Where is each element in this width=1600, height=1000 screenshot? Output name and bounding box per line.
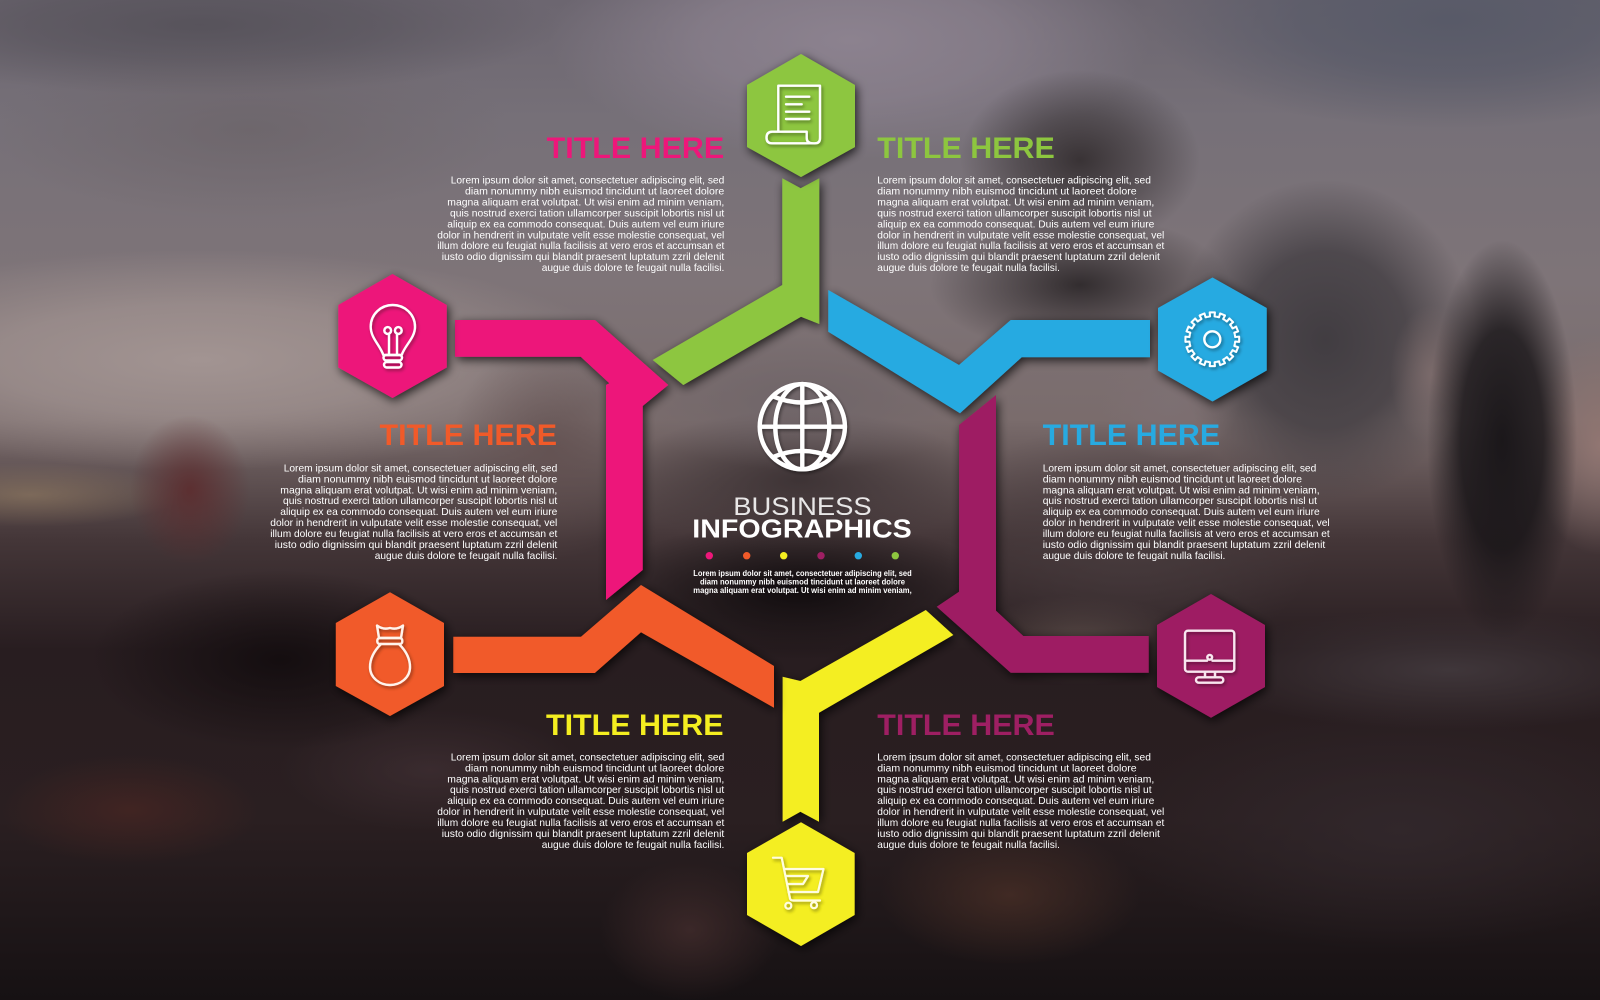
text block: pink: iusto odio dignissim qui blandit praesent luptatum zzril delenit <box>442 252 724 263</box>
hexagon: green document <box>747 54 855 177</box>
text block: orange: aliquip ex ea commodo consequat. Duis autem vel eum iriure <box>280 507 558 518</box>
title: blue: TITLE HERE <box>1043 419 1220 452</box>
centre description: magna aliquam erat volutpat. Ut wisi enim ad minim veniam, <box>693 586 912 595</box>
text block: yellow: Lorem ipsum dolor sit amet, consectetuer adipiscing elit, sed <box>451 752 725 763</box>
text block: orange: magna aliquam erat volutpat. Ut wisi enim ad minim veniam, <box>280 485 557 496</box>
text block: green: augue duis dolore te feugait nulla facilisi. <box>877 263 1060 274</box>
hexagon: pink light bulb <box>338 274 447 398</box>
centre description: diam nonummy nibh euismod tincidunt ut laoreet dolore <box>700 578 906 586</box>
text block: blue: augue duis dolore te feugait nulla facilisi. <box>1043 551 1225 562</box>
text block: plum <box>877 752 1164 851</box>
text block: orange: iusto odio dignissim qui blandit praesent luptatum zzril delenit <box>275 540 557 551</box>
text block: pink: magna aliquam erat volutpat. Ut wisi enim ad minim veniam, <box>447 197 724 208</box>
text block: yellow: iusto odio dignissim qui blandit praesent luptatum zzril delenit <box>442 829 724 840</box>
text block: blue: diam nonummy nibh euismod tincidunt ut laoreet dolore <box>1043 474 1302 485</box>
text block: plum: illum dolore eu feugiat nulla facilisis at vero eros et accumsan et <box>877 818 1164 829</box>
text block: green: Lorem ipsum dolor sit amet, consectetuer adipiscing elit, sed <box>877 176 1151 187</box>
connector arm: yellow <box>783 610 953 822</box>
hexagon: orange money bag <box>336 592 444 716</box>
text block: orange: quis nostrud exerci tation ullamcorper suscipit lobortis nisl ut <box>283 496 557 507</box>
text block: blue: iusto odio dignissim qui blandit praesent luptatum zzril delenit <box>1043 540 1325 551</box>
text block: yellow: diam nonummy nibh euismod tincidunt ut laoreet dolore <box>465 763 725 774</box>
text block: blue: aliquip ex ea commodo consequat. Duis autem vel eum iriure <box>1043 507 1320 518</box>
connector arm: blue <box>828 290 1150 413</box>
text block: orange: diam nonummy nibh euismod tincidunt ut laoreet dolore <box>298 474 558 485</box>
text block: green: aliquip ex ea commodo consequat. Duis autem vel eum iriure <box>877 219 1155 230</box>
icon: shopping cart <box>773 858 824 909</box>
icon: money bag <box>370 626 410 685</box>
centre description: Lorem ipsum dolor sit amet, consectetuer adipiscing elit, sed <box>693 569 912 578</box>
text block: yellow: augue duis dolore te feugait nulla facilisi. <box>542 840 724 851</box>
connector arm: green <box>653 178 819 385</box>
text block: green: quis nostrud exerci tation ullamcorper suscipit lobortis nisl ut <box>877 208 1152 219</box>
text block: pink: illum dolore eu feugiat nulla facilisis at vero eros et accumsan et <box>437 241 724 252</box>
text block: yellow: illum dolore eu feugiat nulla facilisis at vero eros et accumsan et <box>437 818 724 829</box>
text block: green: dolor in hendrerit in vulputate velit esse molestie consequat, vel <box>877 230 1164 241</box>
text block: blue: dolor in hendrerit in vulputate velit esse molestie consequat, vel <box>1043 518 1330 529</box>
centre description <box>693 569 912 595</box>
hexagon: blue gear <box>1158 278 1267 402</box>
hexagon: yellow cart <box>747 822 855 946</box>
heading: infographics: INFOGRAPHICS <box>692 514 912 544</box>
text block: green: diam nonummy nibh euismod tincidunt ut laoreet dolore <box>877 187 1137 198</box>
text block: blue: Lorem ipsum dolor sit amet, consectetuer adipiscing elit, sed <box>1043 463 1317 474</box>
connector arm: plum <box>937 395 1149 673</box>
text block: green: magna aliquam erat volutpat. Ut wisi enim ad minim veniam, <box>877 197 1154 208</box>
text block: pink: augue duis dolore te feugait nulla facilisi. <box>542 263 724 274</box>
text block: yellow <box>437 752 725 851</box>
text block: yellow: dolor in hendrerit in vulputate velit esse molestie consequat, vel <box>437 807 724 818</box>
text block: orange: augue duis dolore te feugait nulla facilisi. <box>375 551 557 562</box>
text block: green <box>877 176 1164 274</box>
title: green: TITLE HERE <box>877 132 1055 165</box>
centre panel <box>692 384 912 595</box>
icon: desktop monitor <box>1185 631 1234 683</box>
text block: pink <box>437 176 725 274</box>
text block: plum: aliquip ex ea commodo consequat. Duis autem vel eum iriure <box>877 796 1155 807</box>
text block: blue: quis nostrud exerci tation ullamcorper suscipit lobortis nisl ut <box>1043 496 1317 507</box>
title: yellow: TITLE HERE <box>546 709 724 742</box>
connector arm: pink <box>455 320 668 600</box>
text block: yellow: aliquip ex ea commodo consequat. Duis autem vel eum iriure <box>447 796 725 807</box>
text block: green: illum dolore eu feugiat nulla facilisis at vero eros et accumsan et <box>877 241 1164 252</box>
text block: yellow: magna aliquam erat volutpat. Ut wisi enim ad minim veniam, <box>447 774 724 785</box>
text block: plum: iusto odio dignissim qui blandit praesent luptatum zzril delenit <box>877 829 1160 840</box>
text block: orange: illum dolore eu feugiat nulla facilisis at vero eros et accumsan et <box>270 529 557 540</box>
title: plum: TITLE HERE <box>877 709 1055 742</box>
text block: plum: diam nonummy nibh euismod tincidunt ut laoreet dolore <box>877 763 1137 774</box>
text block: blue: illum dolore eu feugiat nulla facilisis at vero eros et accumsan et <box>1043 529 1330 540</box>
text block: green: iusto odio dignissim qui blandit praesent luptatum zzril delenit <box>877 252 1160 263</box>
icon: light bulb <box>371 305 415 368</box>
text block: blue <box>1043 463 1330 562</box>
text block: pink: quis nostrud exerci tation ullamcorper suscipit lobortis nisl ut <box>450 208 724 219</box>
colour dots <box>706 552 899 559</box>
text block: plum: Lorem ipsum dolor sit amet, consectetuer adipiscing elit, sed <box>877 752 1151 763</box>
hexagon: plum monitor <box>1157 594 1265 718</box>
text block: plum: augue duis dolore te feugait nulla facilisi. <box>877 840 1060 851</box>
text block: yellow: quis nostrud exerci tation ullamcorper suscipit lobortis nisl ut <box>450 785 724 796</box>
text block: pink: diam nonummy nibh euismod tincidunt ut laoreet dolore <box>465 187 725 198</box>
text block: plum: quis nostrud exerci tation ullamcorper suscipit lobortis nisl ut <box>877 785 1152 796</box>
text block: pink: Lorem ipsum dolor sit amet, consectetuer adipiscing elit, sed <box>451 176 725 187</box>
connector arm: orange <box>453 585 774 708</box>
icon: globe <box>760 384 845 469</box>
text block: pink: dolor in hendrerit in vulputate velit esse molestie consequat, vel <box>437 230 724 241</box>
text block: blue: magna aliquam erat volutpat. Ut wisi enim ad minim veniam, <box>1043 485 1320 496</box>
icon: gear <box>1185 312 1239 366</box>
text block: orange: Lorem ipsum dolor sit amet, consectetuer adipiscing elit, sed <box>284 463 558 474</box>
icon: scroll document <box>766 86 820 143</box>
heading: business: BUSINESS <box>733 493 872 521</box>
text block: plum: dolor in hendrerit in vulputate velit esse molestie consequat, vel <box>877 807 1164 818</box>
text block: plum: magna aliquam erat volutpat. Ut wisi enim ad minim veniam, <box>877 774 1154 785</box>
text block: orange: dolor in hendrerit in vulputate velit esse molestie consequat, vel <box>270 518 557 529</box>
title: orange: TITLE HERE <box>380 419 557 452</box>
text block: pink: aliquip ex ea commodo consequat. Duis autem vel eum iriure <box>447 219 725 230</box>
title: pink: TITLE HERE <box>547 132 724 165</box>
text block: orange <box>270 463 558 562</box>
